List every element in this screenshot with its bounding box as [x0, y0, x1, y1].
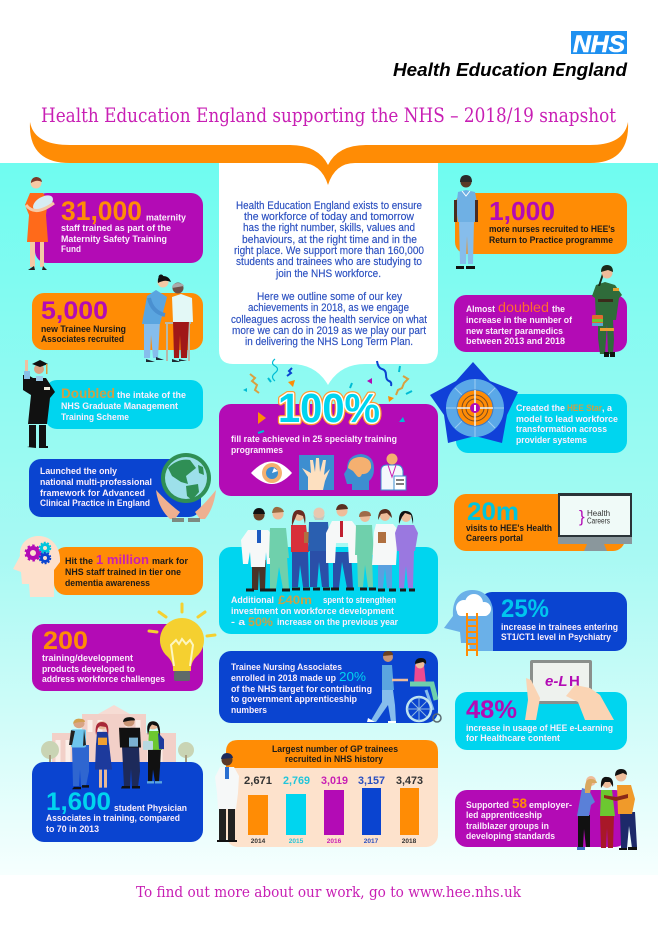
- panel: 200 training products: products developed to: [42, 664, 135, 675]
- icon: doctor with clipboard: [381, 454, 406, 490]
- panel: doubled paramedics: Almost: [466, 304, 496, 315]
- panel: HEE Star: model to lead workforce: [516, 414, 618, 425]
- panel: 100% fill rate: programmes: [231, 445, 283, 456]
- panel: 1,600 physician associates: [32, 705, 203, 842]
- footer call to action: To find out more about our work, go to www.hee.nhs.uk: [136, 883, 522, 901]
- intro text: achievements in 2018, as we engage: [248, 302, 409, 314]
- bar chart: 3,473: [396, 775, 423, 787]
- panel: doubled paramedics: new starter paramedics: [466, 326, 563, 337]
- bar chart: 2015: [289, 838, 304, 845]
- panel: 100% fill rate: 100%: [278, 385, 380, 431]
- bar chart: 2,671: [244, 775, 272, 787]
- panel: advanced clinical practice: national multi-professional: [40, 477, 152, 488]
- panel: 5,000 trainee nursing associates: Associates recruited: [41, 334, 124, 345]
- panel: 48% e-Learning: [455, 660, 627, 750]
- intro text: in delivering the NHS Long Term Plan.: [245, 336, 413, 348]
- panel: £40m workforce development: increase on the previous year: [277, 617, 398, 628]
- panel: 58 trailblazer groups: developing standards: [466, 831, 555, 842]
- panel: 58 trailblazer groups: trailblazer groups in: [466, 821, 549, 832]
- intro text: right place. We support more than 160,000: [234, 245, 424, 257]
- panel: 1,600 physician associates: Associates in training, compared: [46, 813, 180, 824]
- icon: head with gears: [13, 536, 60, 597]
- panel: 1 million dementia awareness: Hit the: [65, 556, 93, 567]
- panel: trainee nursing associates apprenticeship: of the NHS target for contributing: [231, 684, 372, 695]
- panel: 48% e-Learning: for Healthcare content: [466, 733, 561, 744]
- icon: computer monitor: Health: [587, 509, 610, 518]
- intro text: Here we outline some of our key: [257, 291, 403, 303]
- panel: 58 trailblazer groups: [455, 769, 637, 850]
- icon: eye: [251, 462, 292, 484]
- icon: computer monitor: }: [579, 507, 585, 526]
- panel: 1,600 physician associates: to 70 in 2013: [46, 824, 99, 835]
- panel: 25% psychiatry: increase in trainees entering: [501, 622, 618, 633]
- logo: NHS Health Education England: NHS: [573, 31, 625, 58]
- panel: trainee nursing associates apprenticeship: numbers: [231, 705, 267, 716]
- orange brace: [30, 122, 628, 185]
- panel: 48% e-Learning: increase in usage of HEE e-Learning: [466, 723, 613, 734]
- panel: doubled intake graduate scheme: NHS Graduate Management: [61, 401, 179, 412]
- panel: £40m workforce development: 50%: [248, 615, 273, 629]
- panel: HEE Star: Created the: [516, 403, 565, 414]
- icon: mother and baby: [25, 177, 56, 270]
- panel: 200 training products: 200: [43, 627, 88, 655]
- panel: advanced clinical practice: framework for Advanced: [40, 488, 145, 499]
- bar chart: 2018: [402, 838, 417, 845]
- panel: 31,000 maternity staff: [25, 177, 203, 270]
- bar chart: 2017: [364, 838, 379, 845]
- icon: nurse pushing wheelchair: [367, 651, 441, 723]
- panel: 31,000 maternity staff: Maternity Safety Training: [61, 234, 167, 245]
- panel: doubled paramedics: doubled: [498, 299, 549, 315]
- panel: 20m visits Health Careers: Careers portal: [466, 533, 523, 544]
- panel: doubled intake graduate scheme: [23, 360, 203, 448]
- panel: 1,000 more nurses: 1,000: [489, 196, 555, 226]
- panel: £40m workforce development: spent to strengthen: [323, 595, 396, 606]
- panel: £40m workforce development: £40m: [278, 593, 312, 607]
- bar chart: 2,769: [283, 775, 310, 787]
- bar chart: 3,019: [321, 775, 348, 787]
- panel: HEE Star: [430, 362, 627, 453]
- intro panel: [30, 122, 628, 385]
- panel: HEE Star: transformation across: [516, 424, 607, 435]
- panel: 5,000 trainee nursing associates: new Trainee Nursing: [41, 324, 126, 335]
- panel: 58 trailblazer groups: led apprenticeship: [466, 810, 542, 821]
- panel: 1 million dementia awareness: 1 million: [96, 552, 149, 567]
- intro text: behaviours, at the right time and in the: [242, 234, 417, 246]
- icon: nurse: [454, 175, 478, 269]
- illustration: four students: [69, 717, 164, 789]
- panel: 1,000 more nurses: more nurses recruited to HEE's: [489, 224, 615, 235]
- panel: 1 million dementia awareness: [13, 536, 203, 597]
- panel: £40m workforce development: [219, 504, 438, 634]
- panel: 200 training products: address workforce challenges: [42, 674, 165, 685]
- icon: tablet in hands: H: [569, 673, 580, 690]
- panel: HEE Star: HEE Star: [567, 403, 602, 414]
- panel: 1 million dementia awareness: NHS staff trained in tier one: [65, 567, 181, 578]
- panel: 31,000 maternity staff: staff trained as part of the: [61, 223, 171, 234]
- panel: 5,000 trainee nursing associates: [32, 274, 203, 362]
- icon: computer monitor: Careers: [587, 516, 610, 526]
- intro text: [231, 200, 427, 348]
- panel: 58 trailblazer groups: 58: [512, 795, 527, 811]
- panel: trainee nursing associates apprenticeship: Trainee Nursing Associates: [231, 662, 342, 673]
- icon: tablet in hands: [525, 660, 614, 720]
- panel: GP trainees bar chart: Largest number of GP trainees: [272, 744, 398, 755]
- panel: GP trainees bar chart: [215, 740, 438, 847]
- illustration: eight healthcare staff: [241, 504, 418, 590]
- panel: 1,000 more nurses: Return to Practice programme: [489, 235, 613, 246]
- intro text: colleagues across the health service on what: [231, 314, 427, 326]
- icon: graduate: [23, 360, 55, 448]
- panel: 25% psychiatry: ST1/CT1 level in Psychiatry: [501, 632, 612, 643]
- intro text: has the right number, skills, values and: [243, 222, 415, 234]
- panel: trainee nursing associates apprenticeship: 20%: [339, 669, 366, 684]
- icon: paramedic: [592, 265, 622, 357]
- panel: 100% fill rate: fill rate achieved in 25 specialty training: [231, 434, 397, 445]
- intro text: Health Education England exists to ensure: [236, 200, 422, 212]
- panel: 20m visits Health Careers: visits to HEE's Health: [466, 523, 552, 534]
- intro text: join the NHS workforce.: [275, 268, 381, 280]
- panel: doubled intake graduate scheme: Training Scheme: [61, 412, 129, 423]
- icon: nurse helping patient with walker: [142, 274, 193, 362]
- intro text: the workforce of today and tomorrow: [244, 211, 414, 223]
- logo: NHS Health Education England: [393, 31, 628, 80]
- confetti: [250, 359, 412, 433]
- panel: 1,600 physician associates: student Physician: [114, 803, 187, 814]
- panel: £40m workforce development: investment on workforce development: [231, 606, 395, 617]
- panel: 1,000 more nurses: [454, 175, 627, 269]
- panel: trainee nursing associates apprenticeship: enrolled in 2018 made up: [231, 673, 336, 684]
- bar chart: 2016: [327, 838, 342, 845]
- logo: NHS Health Education England: Health Education England: [393, 60, 628, 80]
- panel: HEE Star: , a: [602, 403, 613, 414]
- panel: 31,000 maternity staff: maternity: [146, 212, 187, 224]
- panel: doubled paramedics: between 2013 and 2018: [466, 336, 566, 347]
- panel: advanced clinical practice: Clinical Practice in England: [40, 498, 150, 509]
- panel: 200 training products: [32, 604, 215, 691]
- panel: doubled paramedics: [454, 265, 627, 357]
- panel: doubled paramedics: increase in the number of: [466, 315, 573, 326]
- panel: 100% fill rate: [219, 359, 438, 496]
- icon: head with cloud and ladder: [444, 590, 493, 656]
- icon: HEE Star model: [430, 362, 518, 443]
- panel: 25% psychiatry: [444, 590, 627, 656]
- panel: 58 trailblazer groups: Supported: [466, 800, 509, 811]
- background gradient: [0, 163, 658, 875]
- panel: 25% psychiatry: 25%: [501, 595, 549, 623]
- icon: computer monitor: [558, 493, 632, 551]
- illustration: college building: [41, 705, 194, 769]
- panel: 1,600 physician associates: 1,600: [46, 788, 111, 816]
- icon: doctor: [215, 753, 239, 842]
- panel: 20m visits Health Careers: 20m: [467, 498, 519, 526]
- panel: 200 training products: training/development: [42, 653, 134, 664]
- panel: trainee nursing associates apprenticeship: [219, 651, 441, 723]
- icon: hand x-ray: [299, 455, 334, 490]
- panel: 58 trailblazer groups: employer-: [529, 800, 572, 811]
- panel: advanced clinical practice: Launched the only: [40, 466, 118, 477]
- icon: three people reading: [577, 769, 637, 850]
- panel: 5,000 trainee nursing associates: 5,000: [41, 297, 108, 325]
- panel: doubled paramedics: the: [552, 304, 565, 315]
- panel: trainee nursing associates apprenticeship: to government apprenticeship: [231, 694, 357, 705]
- panel: 31,000 maternity staff: Fund: [61, 244, 81, 255]
- panel: doubled intake graduate scheme: Doubled: [61, 385, 115, 401]
- bar chart: 2014: [251, 838, 266, 845]
- bar chart: [244, 775, 423, 845]
- panel: 48% e-Learning: 48%: [466, 696, 517, 724]
- bar chart: 3,157: [358, 775, 385, 787]
- panel: £40m workforce development: - a: [231, 617, 246, 628]
- panel: GP trainees bar chart: recruited in NHS history: [285, 754, 384, 765]
- intro text: students and trainees who are studying to: [236, 256, 422, 268]
- panel: advanced clinical practice: [29, 453, 216, 522]
- panel: £40m workforce development: Additional: [231, 595, 274, 606]
- panel: 100% fill rate: 100%: [278, 385, 380, 431]
- panel: 1 million dementia awareness: dementia awareness: [65, 578, 150, 589]
- panel: 20m visits Health Careers: [454, 493, 632, 551]
- panel: doubled intake graduate scheme: the intake of the: [117, 390, 186, 401]
- icon: light bulb: [149, 604, 215, 681]
- icon: globe in hands: [156, 453, 216, 522]
- panel: HEE Star: provider systems: [516, 435, 587, 446]
- panel: 1 million dementia awareness: mark for: [152, 556, 188, 567]
- intro text: more we can do in 2019 as we play our part: [232, 325, 426, 337]
- icon: head with brain: [344, 454, 374, 490]
- panel: 31,000 maternity staff: 31,000: [61, 196, 142, 226]
- icon: tablet in hands: e-L: [545, 673, 568, 690]
